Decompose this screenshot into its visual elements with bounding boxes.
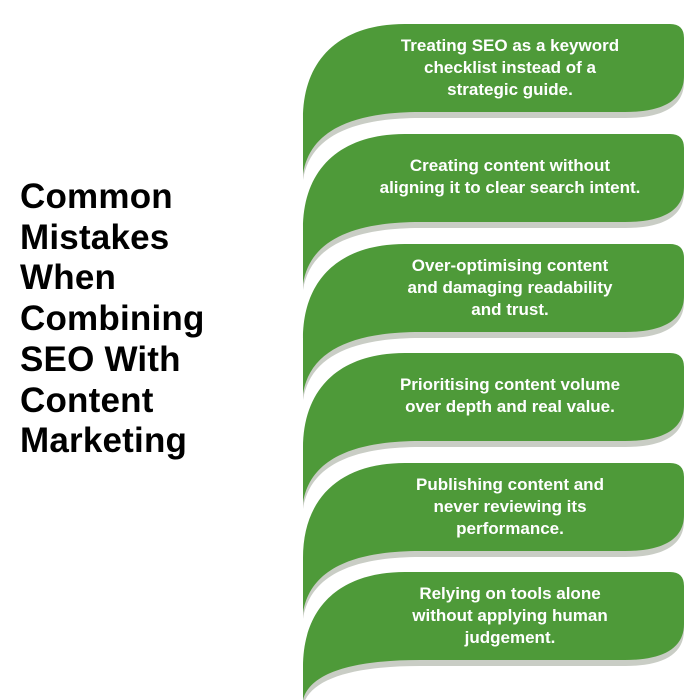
card 3: and damaging readability (408, 278, 613, 297)
card 6: without applying human (411, 606, 608, 625)
title: When (20, 258, 116, 297)
card 2: Creating content without (410, 156, 610, 175)
card 3: and trust. (471, 300, 549, 319)
card 1: strategic guide. (447, 80, 573, 99)
card 5: performance. (456, 519, 564, 538)
card 6: judgement. (464, 628, 555, 647)
card 2: aligning it to clear search intent. (380, 178, 640, 197)
card 1: checklist instead of a (424, 58, 597, 77)
card 6: Relying on tools alone (419, 584, 601, 603)
title: SEO With (20, 340, 181, 379)
card 5 (303, 463, 684, 673)
card 5: never reviewing its (433, 497, 587, 516)
card 4: over depth and real value. (405, 397, 615, 416)
title (20, 177, 205, 460)
title: Combining (20, 299, 205, 338)
card 4 (303, 353, 684, 563)
card 2 (303, 134, 684, 344)
title: Common (20, 177, 173, 216)
title: Marketing (20, 421, 187, 460)
card 6 (303, 572, 684, 700)
card 4: Prioritising content volume (400, 375, 620, 394)
card 5: Publishing content and (416, 475, 604, 494)
title: Mistakes (20, 218, 169, 257)
card 1: Treating SEO as a keyword (401, 36, 619, 55)
card 3: Over-optimising content (412, 256, 609, 275)
card 3 (303, 244, 684, 454)
card 1 (303, 24, 684, 234)
title: Content (20, 381, 154, 420)
